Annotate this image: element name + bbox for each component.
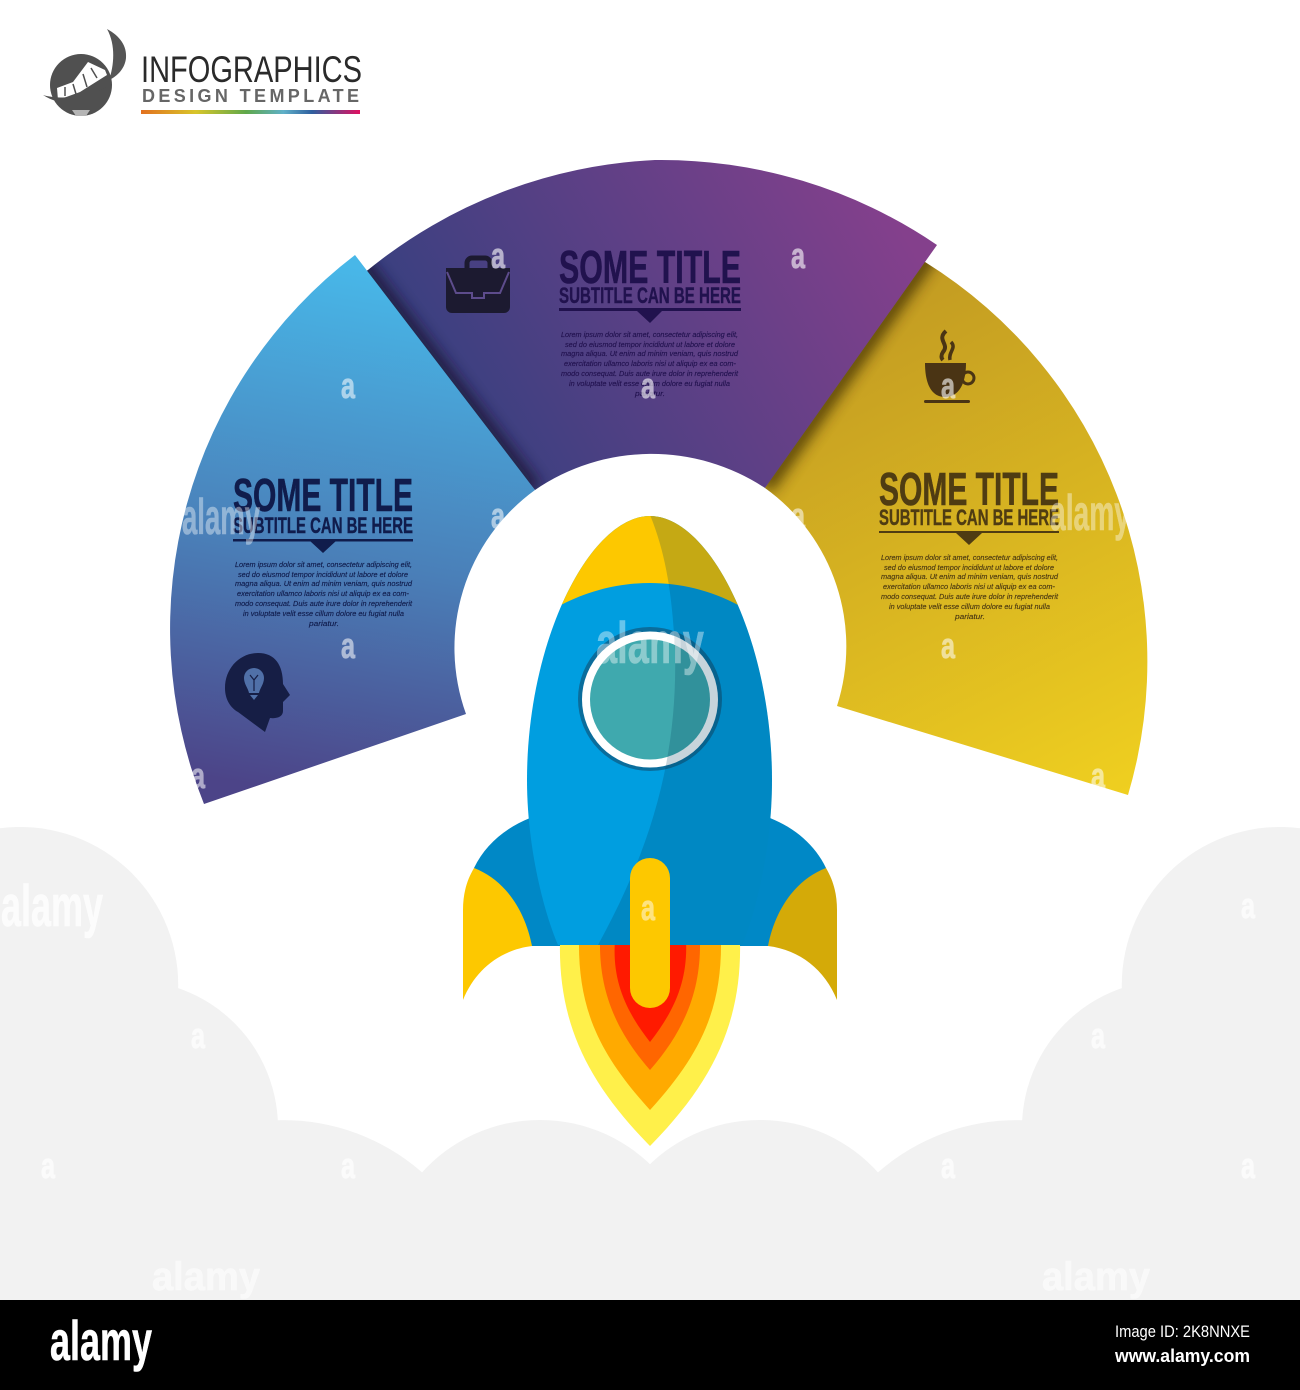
- watermarks: a: [191, 755, 206, 796]
- heading: gold title: SOME TITLE: [879, 463, 1059, 515]
- footer bar: [0, 1300, 1300, 1390]
- image id: Image ID: 2K8NNXE: [1115, 1322, 1250, 1341]
- text block: blue body: [235, 560, 413, 628]
- logo mark: [43, 29, 126, 116]
- clouds: [0, 827, 1300, 1300]
- watermarks: alamy: [182, 489, 260, 545]
- watermarks: [1, 235, 1256, 1299]
- logo heading: INFOGRAPHICS: [141, 49, 362, 90]
- watermarks: a: [491, 495, 506, 536]
- watermarks: a: [791, 235, 806, 276]
- icon: coffee cup: [924, 331, 974, 403]
- text block: blue body: in voluptate velit esse cillum dolore eu fugiat nulla: [243, 609, 404, 618]
- footer logo: alamy: [50, 1309, 152, 1372]
- watermarks: alamy: [152, 1255, 261, 1299]
- segment: purple top: [355, 160, 937, 490]
- text block: purple body: [561, 330, 739, 398]
- watermarks: a: [41, 1145, 56, 1186]
- watermarks: a: [941, 365, 956, 406]
- text block: gold body: exercitation ullamco laboris nisi ut aliquip ex ea com-: [883, 582, 1055, 591]
- watermarks: a: [341, 1145, 356, 1186]
- logo subheading: DESIGN TEMPLATE: [142, 86, 359, 106]
- rainbow bar: [141, 110, 360, 114]
- rocket: [463, 510, 837, 1146]
- text block: purple body: in voluptate velit esse cillum dolore eu fugiat nulla: [569, 379, 730, 388]
- text block: blue body: sed do eiusmod tempor incididunt ut labore et dolore: [238, 570, 408, 579]
- logo: [43, 29, 362, 116]
- text block: gold body: in voluptate velit esse cillum dolore eu fugiat nulla: [889, 602, 1050, 611]
- website: www.alamy.com: [1114, 1346, 1250, 1366]
- nose cone: [562, 516, 738, 605]
- text block: blue body: Lorem ipsum dolor sit amet, consectetur adipiscing elit,: [235, 560, 412, 569]
- watermarks: a: [1091, 1015, 1106, 1056]
- heading: gold title: [879, 463, 1059, 545]
- heading: purple title: SOME TITLE: [559, 241, 741, 293]
- watermarks: alamy: [1042, 1255, 1151, 1299]
- watermarks: a: [191, 1015, 206, 1056]
- icon: head with lightbulb: [225, 653, 290, 732]
- heading: blue title: SUBTITLE CAN BE HERE: [233, 513, 413, 538]
- text block: blue body: modo consequat. Duis aute irure dolor in reprehenderit: [235, 599, 413, 608]
- text block: gold body: pariatur.: [954, 612, 985, 621]
- watermarks: alamy: [596, 611, 704, 676]
- text block: purple body: exercitation ullamco laboris nisi ut aliquip ex ea com-: [564, 359, 736, 368]
- text block: blue body: pariatur.: [308, 619, 339, 628]
- exhaust nozzle: [630, 858, 670, 1008]
- watermarks: a: [341, 365, 356, 406]
- heading: blue title: [233, 469, 413, 553]
- text block: blue body: exercitation ullamco laboris nisi ut aliquip ex ea com-: [237, 589, 409, 598]
- text block: gold body: [881, 553, 1059, 621]
- watermarks: a: [1241, 1145, 1256, 1186]
- text block: gold body: magna aliqua. Ut enim ad minim veniam, quis nostrud: [881, 572, 1059, 581]
- watermarks: a: [641, 365, 656, 406]
- heading: purple title: [559, 241, 741, 323]
- text block: gold body: Lorem ipsum dolor sit amet, consectetur adipiscing elit,: [881, 553, 1058, 562]
- watermarks: alamy: [1050, 485, 1130, 541]
- text block: purple body: magna aliqua. Ut enim ad minim veniam, quis nostrud: [561, 349, 739, 358]
- heading: gold title: SUBTITLE CAN BE HERE: [879, 505, 1059, 530]
- text block: gold body: modo consequat. Duis aute irure dolor in reprehenderit: [881, 592, 1059, 601]
- wings: [463, 818, 837, 1000]
- window: [578, 627, 722, 771]
- text block: gold body: sed do eiusmod tempor incididunt ut labore et dolore: [884, 563, 1054, 572]
- watermarks: a: [1091, 755, 1106, 796]
- text block: purple body: sed do eiusmod tempor incididunt ut labore et dolore: [565, 340, 735, 349]
- watermarks: a: [791, 495, 806, 536]
- icon: briefcase: [446, 258, 510, 313]
- text block: purple body: modo consequat. Duis aute irure dolor in reprehenderit: [561, 369, 739, 378]
- segment: gold right: [765, 245, 1147, 795]
- body: [527, 516, 772, 945]
- shading: [598, 510, 780, 945]
- watermarks: a: [491, 235, 506, 276]
- text block: purple body: Lorem ipsum dolor sit amet, consectetur adipiscing elit,: [561, 330, 738, 339]
- text block: blue body: magna aliqua. Ut enim ad minim veniam, quis nostrud: [235, 579, 413, 588]
- flames: [560, 940, 740, 1146]
- watermarks: a: [941, 625, 956, 666]
- watermarks: alamy: [1, 874, 103, 939]
- heading: blue title: SOME TITLE: [233, 469, 413, 521]
- text block: purple body: pariatur.: [634, 389, 665, 398]
- heading: purple title: SUBTITLE CAN BE HERE: [559, 283, 741, 308]
- watermarks: a: [1241, 885, 1256, 926]
- watermarks: a: [941, 1145, 956, 1186]
- watermarks: a: [341, 625, 356, 666]
- watermarks: a: [641, 887, 656, 928]
- segment: blue left: [170, 255, 535, 804]
